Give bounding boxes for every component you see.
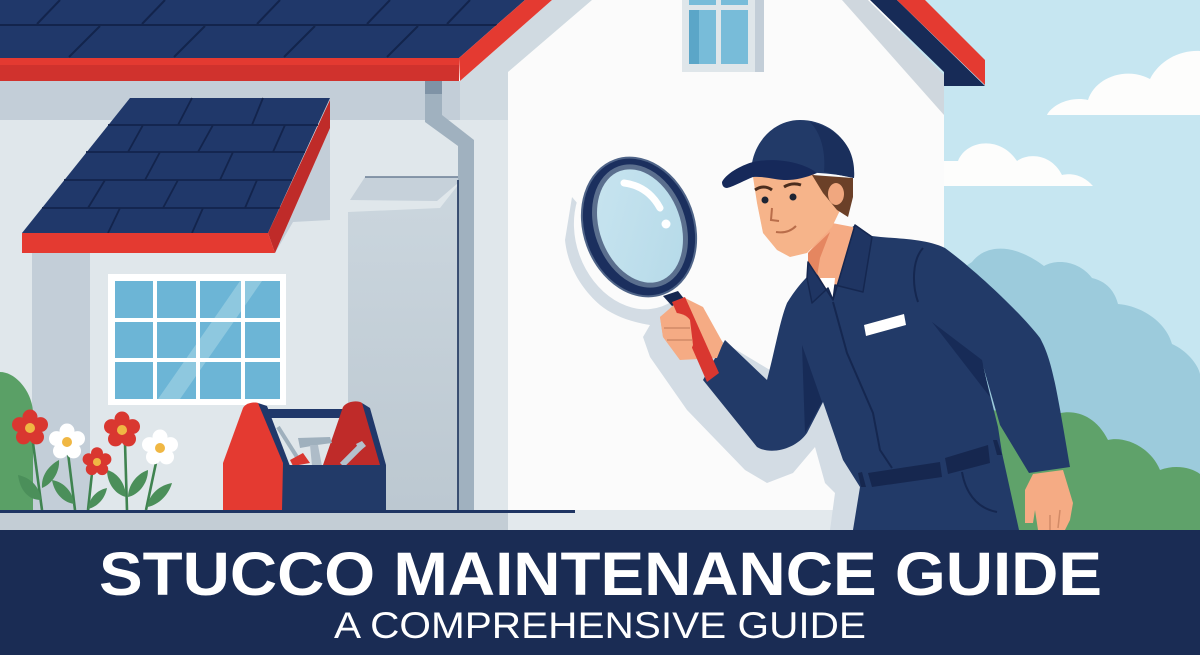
upper window [682,0,764,72]
distant blue trees [944,249,1200,530]
porch awning roof [22,98,330,253]
face details [762,196,768,204]
toolbox [223,401,386,510]
right hand [1025,470,1073,530]
porch column [32,253,90,510]
handle and gripping hand [660,297,723,360]
title text: STUCCO MAINTENANCE GUIDE [99,540,1102,608]
sky background [900,0,1200,530]
ear [828,183,844,205]
cap [752,120,854,178]
right gable roof edge [870,0,985,86]
collar [807,225,872,303]
uniform folds and seams [932,322,990,397]
green bushes right [985,410,1200,530]
left wall [0,120,508,515]
subtitle text: A COMPREHENSIVE GUIDE [334,605,866,646]
porch roof wall shadow [275,128,330,253]
clouds [944,51,1200,186]
worker [703,120,1073,530]
pillar and bracket [348,177,458,510]
green bush left [0,372,33,510]
gable trim band right [842,0,944,115]
name badge [864,314,906,336]
magnifier and worker cast shadow on wall [554,143,860,530]
white gable wall [508,0,944,530]
downspout [425,81,474,510]
undershirt [820,278,835,300]
magnifying glass [563,141,723,382]
house window [108,274,286,405]
main roof [0,0,552,81]
eave fascia [0,0,592,120]
title banner [0,530,1200,655]
belt [858,440,1002,487]
neck [808,223,855,300]
hair [812,175,853,217]
ground curb [0,510,848,530]
uniform body and sleeves [703,225,1070,530]
head [753,173,845,257]
flowers [12,410,178,510]
